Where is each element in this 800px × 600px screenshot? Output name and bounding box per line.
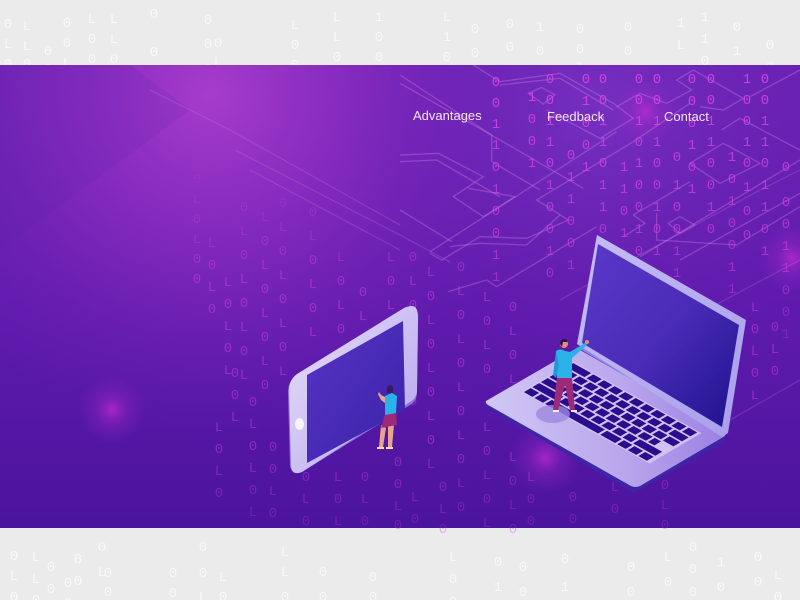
top band: LL0: [329, 10, 345, 66]
binary digit rain: upper right columns: 010011: [669, 150, 685, 282]
binary digit rain: left columns: L0: [407, 490, 423, 528]
top band: L10: [439, 10, 455, 66]
top band: 00L: [59, 16, 75, 72]
binary digit rain: left columns: 0L0L0L0L: [275, 196, 291, 380]
binary digit rain: upper right columns: 001100101: [649, 72, 665, 260]
bottom band: B0: [70, 552, 86, 590]
binary digit rain: left columns: 00L0: [265, 440, 281, 522]
legs: [379, 425, 394, 447]
shoes: [553, 410, 577, 412]
laptop deck: [486, 349, 725, 487]
bottom band: 0L: [94, 540, 110, 581]
binary digit rain: upper right columns: 001010010: [631, 72, 647, 260]
binary digit rain: left columns: L0L0: [204, 236, 220, 318]
keyboard: [522, 362, 700, 463]
nav item: Contact: Contact: [664, 109, 709, 124]
binary digit rain: upper right columns: [488, 72, 794, 343]
binary digit rain: left columns: 0L0: [767, 320, 783, 380]
binary digit rain: upper right columns: 00110010: [703, 72, 719, 238]
head and hair: [387, 385, 393, 393]
bottom band: 00: [100, 566, 116, 600]
top band: [0, 0, 800, 78]
top band: 00: [762, 38, 778, 76]
laptop: [486, 235, 746, 493]
laptop base underside: [487, 403, 725, 493]
bottom band: 00: [43, 560, 59, 598]
man figure: [536, 339, 589, 423]
arm: [378, 392, 385, 403]
binary digit rain: left columns: 00: [565, 490, 581, 528]
top band: 00: [502, 17, 518, 56]
top band: L00: [287, 18, 303, 74]
top band: 10: [532, 20, 548, 60]
tablet: [288, 306, 418, 473]
top band: 0L0: [0, 17, 16, 73]
binary digit rain: left columns: L0L: [383, 250, 399, 314]
tablet home button: [295, 418, 304, 430]
binary digit rain: upper right columns: 0011010010: [542, 72, 558, 282]
binary digit rain: left columns: L0L0L0L0L: [423, 265, 439, 473]
binary digit rain: left columns: 0L0: [657, 478, 673, 534]
bottom band: 10: [713, 555, 729, 596]
binary digit rain: left columns: 00L: [227, 366, 243, 426]
binary digit rain: upper right columns: 10010100: [739, 72, 755, 244]
binary digit rain: upper right columns: 1001: [524, 90, 540, 172]
shoes: [377, 447, 393, 449]
binary digit rain: upper right columns: 110101: [616, 160, 632, 286]
binary digit rain: upper right columns: 0011011001: [595, 72, 611, 282]
top band: LL0: [106, 12, 122, 68]
top band: 001: [572, 22, 588, 76]
binary digit rain: upper right columns: 0011010011: [488, 75, 504, 286]
top band: 00: [620, 20, 636, 60]
top band: 01: [729, 20, 745, 60]
top band: 100: [371, 10, 387, 66]
laptop lid frame: [577, 235, 746, 437]
binary digit rain: left columns: L0L0L0L0: [257, 210, 273, 394]
bottom band: 000: [685, 540, 701, 600]
shadow: [536, 405, 570, 423]
binary digit rain: left columns: [189, 172, 783, 538]
top band: 0L: [210, 36, 226, 71]
binary digit rain: left columns: L0L0L: [747, 300, 763, 404]
binary digit rain: left columns: 0L0L0L0L: [236, 200, 252, 384]
bottom band: 00: [515, 560, 531, 600]
laptop screen: [582, 244, 739, 427]
binary digit rain: upper right columns: 011001: [563, 148, 579, 274]
purple hero background: [0, 65, 800, 528]
binary digit rain: upper right columns: 001101101: [757, 72, 773, 260]
binary digit rain: left columns: L0L0L0L0L: [479, 290, 495, 532]
binary digit rain: left columns: 0L0: [357, 470, 373, 530]
binary digit rain: left columns: L0: [607, 480, 623, 518]
binary digit rain: upper right columns: 00011001: [778, 160, 794, 343]
binary digit rain: left columns: L0L0L0: [333, 250, 349, 386]
left arm: [553, 351, 559, 378]
glow spots: [78, 78, 800, 494]
bottom band: 01: [490, 555, 506, 596]
binary digit rain: left columns: 00L0: [390, 455, 406, 534]
bottom band: [0, 528, 800, 600]
top band: 00: [146, 7, 162, 61]
binary digit rain: left columns: 0L0L0L0: [405, 250, 421, 410]
binary digit rain: upper right columns: 1010011: [724, 150, 740, 298]
binary digit rain: left columns: L0L0: [211, 420, 227, 502]
skirt: [381, 412, 397, 428]
top band: L00: [84, 12, 100, 68]
binary digit rain: left columns: 0L0L00: [189, 172, 205, 288]
binary digit rain: left columns: 0L0L: [355, 285, 371, 373]
woman figure: [377, 385, 397, 449]
circuit lines: [150, 65, 800, 420]
top band: LL0: [19, 19, 35, 73]
shirt: [385, 393, 397, 415]
hinge strip: [578, 344, 725, 434]
tablet screen: [307, 321, 405, 463]
binary digit rain: left columns: 0L0LL0L0: [505, 300, 521, 538]
torso: [556, 343, 587, 378]
bottom band: 01: [557, 552, 573, 596]
binary digit rain: upper right columns: 000101: [684, 72, 700, 198]
binary digit rain: left columns: 0L0: [435, 480, 451, 538]
binary digit rain: left columns: 0L0L0L0L0L0: [453, 260, 469, 516]
binary digit rain: left columns: L00: [523, 470, 539, 530]
top band: 1L: [673, 16, 689, 54]
binary digit rain: left columns: 0L0L0L: [305, 205, 321, 341]
bottom band: 00: [623, 560, 639, 600]
binary digit rain: left columns: 0L0: [298, 470, 314, 530]
bottom band: L0: [660, 550, 676, 591]
navigation: [413, 108, 709, 124]
nav item: Feedback: Feedback: [547, 109, 605, 124]
top band: 000: [200, 13, 216, 78]
head and hair: [560, 340, 568, 348]
top band: 110: [697, 10, 713, 70]
legs: [553, 378, 575, 410]
top band: 00: [40, 44, 56, 78]
raised hand: [585, 340, 589, 344]
binary digit rain: upper right columns: 01001: [578, 72, 594, 176]
binary digit rain: left columns: L0L0L: [220, 275, 236, 379]
bottom band: 00: [750, 550, 766, 591]
binary digit rain: left columns: L0L: [330, 470, 346, 530]
tablet body: [288, 307, 418, 473]
top band: 00: [467, 22, 483, 62]
binary digit rain: left columns: 0L0L0L: [245, 395, 261, 521]
nav item: Advantages: Advantages: [413, 108, 482, 123]
